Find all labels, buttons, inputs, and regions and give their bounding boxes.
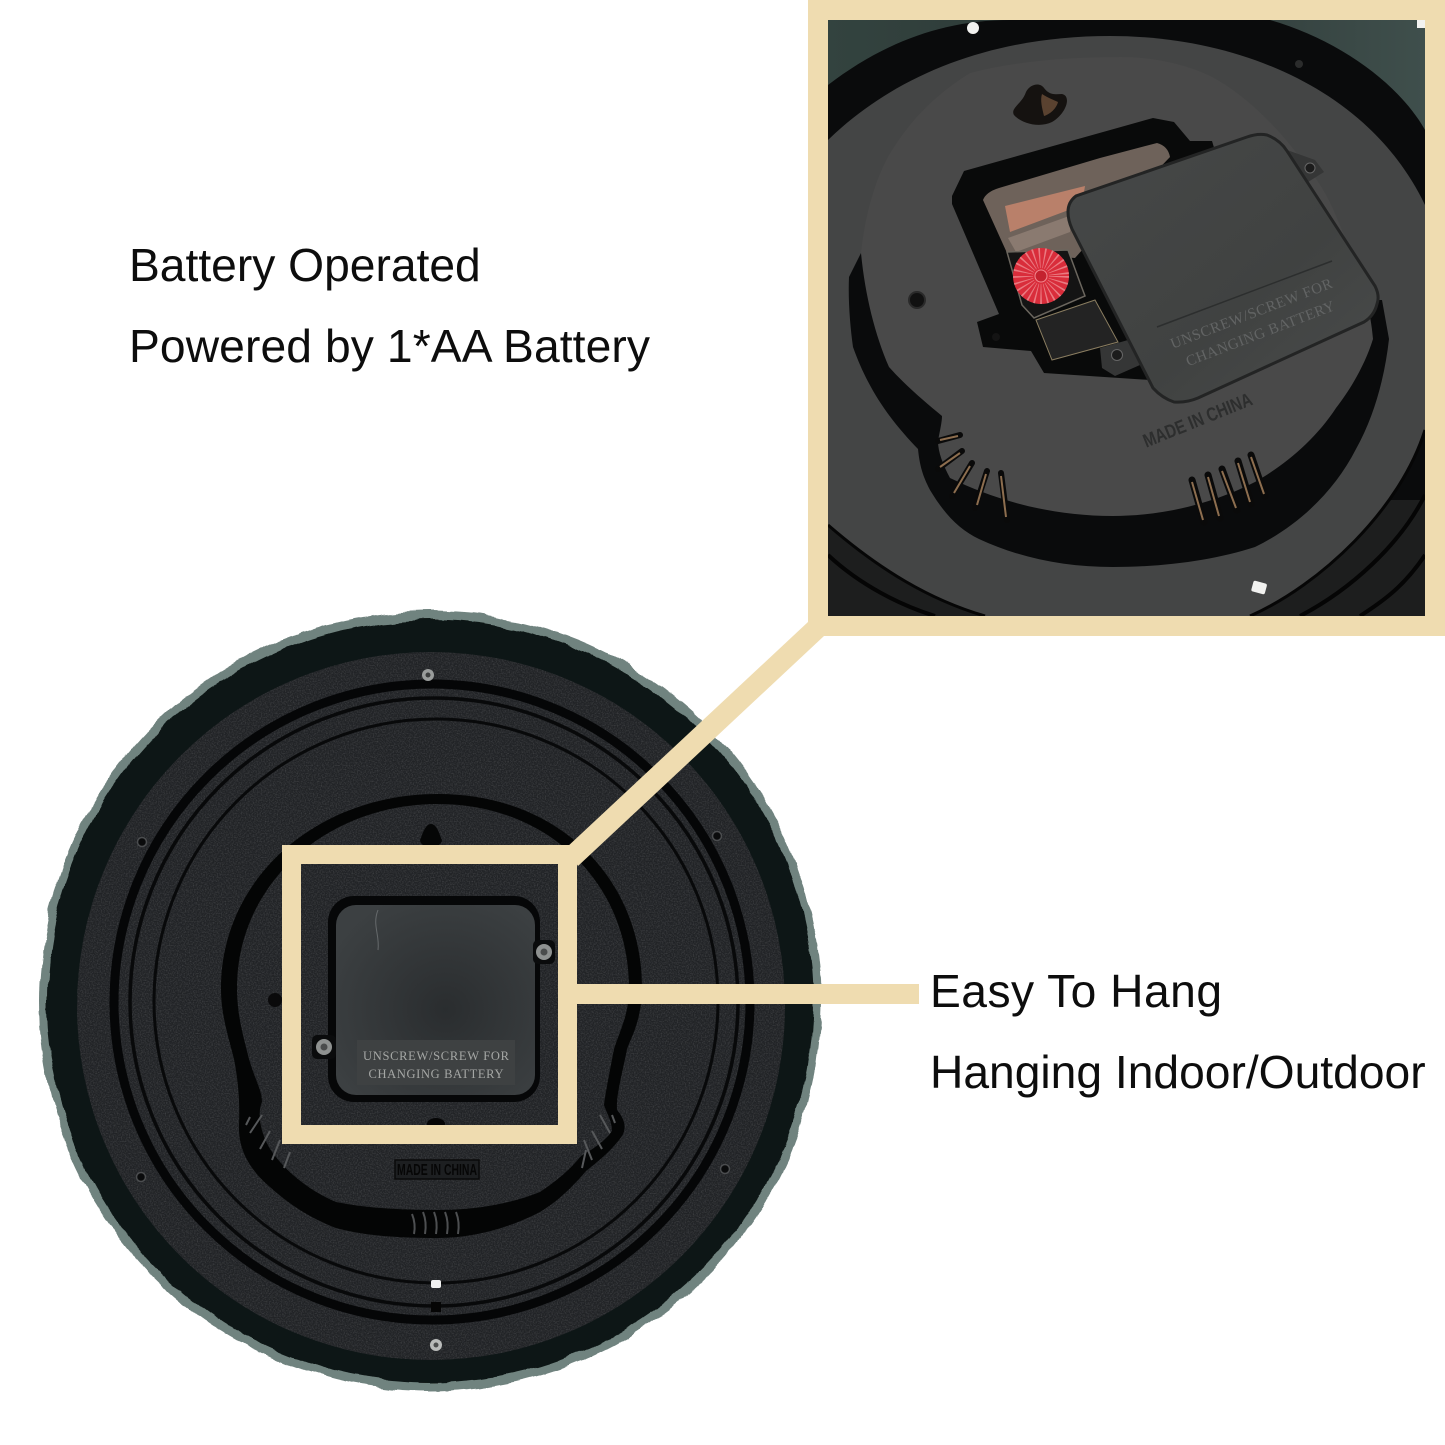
clock back view — [39, 611, 821, 1391]
inset recessed band — [849, 253, 1389, 567]
highlight square — [292, 854, 568, 1134]
lower cover ear — [1100, 340, 1140, 376]
red gear — [1013, 248, 1069, 304]
vents left — [938, 435, 1007, 520]
inset background — [828, 20, 1425, 130]
screws — [422, 669, 442, 1351]
vents right — [1192, 455, 1265, 522]
cover screw right — [533, 940, 555, 964]
hanging keyhole — [1013, 85, 1067, 125]
lower hole — [427, 1118, 445, 1130]
text: battery operated: Battery Operated — [129, 239, 481, 291]
movement frame — [1007, 250, 1085, 318]
movement recess — [952, 118, 1230, 380]
white screws — [967, 20, 1425, 595]
concentric grooves — [114, 684, 750, 1320]
movement reflection — [1008, 217, 1070, 251]
upper cover ear — [1287, 150, 1324, 182]
cover screw left — [312, 1035, 336, 1059]
right vents — [582, 1115, 615, 1168]
cover label line — [1157, 261, 1332, 327]
battery cover open — [1068, 134, 1378, 402]
lower right dark groove — [1300, 495, 1425, 616]
made in china mark — [395, 1160, 479, 1179]
keyhole highlight — [1041, 94, 1058, 116]
clock recessed band — [221, 794, 642, 1238]
left vents — [246, 1115, 290, 1168]
battery cover — [328, 896, 540, 1102]
small hole — [1295, 60, 1303, 68]
side hole — [909, 292, 925, 308]
clock back view: UNSCREW/SCREW FOR — [363, 1049, 510, 1063]
lower corner shade — [828, 500, 1425, 616]
clear movement — [983, 143, 1170, 258]
inset black ring — [828, 20, 1425, 500]
callout connector to inset — [566, 622, 824, 866]
cover label — [357, 1040, 515, 1085]
battery cover scratch — [376, 910, 378, 950]
lower left dark groove — [828, 555, 935, 616]
clock dark ring — [47, 620, 813, 1382]
clock back view: CHANGING BATTERY — [368, 1067, 504, 1081]
cover label text: UNSCREW/SCREW FOR — [1168, 276, 1335, 353]
orange battery — [1005, 186, 1085, 232]
clock back plate — [77, 652, 785, 1360]
made in china mark: MADE IN CHINA — [1140, 389, 1256, 452]
text: battery operated — [129, 239, 650, 372]
cover label text: CHANGING BATTERY — [1184, 298, 1337, 370]
callout connector to label — [577, 984, 919, 1004]
text: easy to hang: Easy To Hang — [930, 965, 1222, 1017]
hanging hole — [420, 824, 442, 847]
mounting holes — [136, 832, 730, 1182]
plate texture — [77, 652, 785, 1360]
inset outer plate — [828, 36, 1425, 616]
plate edge — [828, 430, 1425, 616]
text: easy to hang — [930, 965, 1426, 1098]
clock outer rim — [39, 611, 821, 1391]
made in china mark: MADE IN CHINA — [397, 1162, 477, 1179]
text: battery operated: Powered by 1*AA Battery — [129, 320, 650, 372]
text: easy to hang: Hanging Indoor/Outdoor — [930, 1046, 1426, 1098]
side hole — [268, 993, 282, 1007]
inset raised disc — [861, 253, 1373, 516]
bottom vents — [412, 1212, 459, 1234]
inset photo — [808, 0, 1445, 636]
left recess ear — [992, 333, 1000, 341]
lower mechanism — [1036, 300, 1118, 360]
inset frame — [808, 0, 1445, 636]
